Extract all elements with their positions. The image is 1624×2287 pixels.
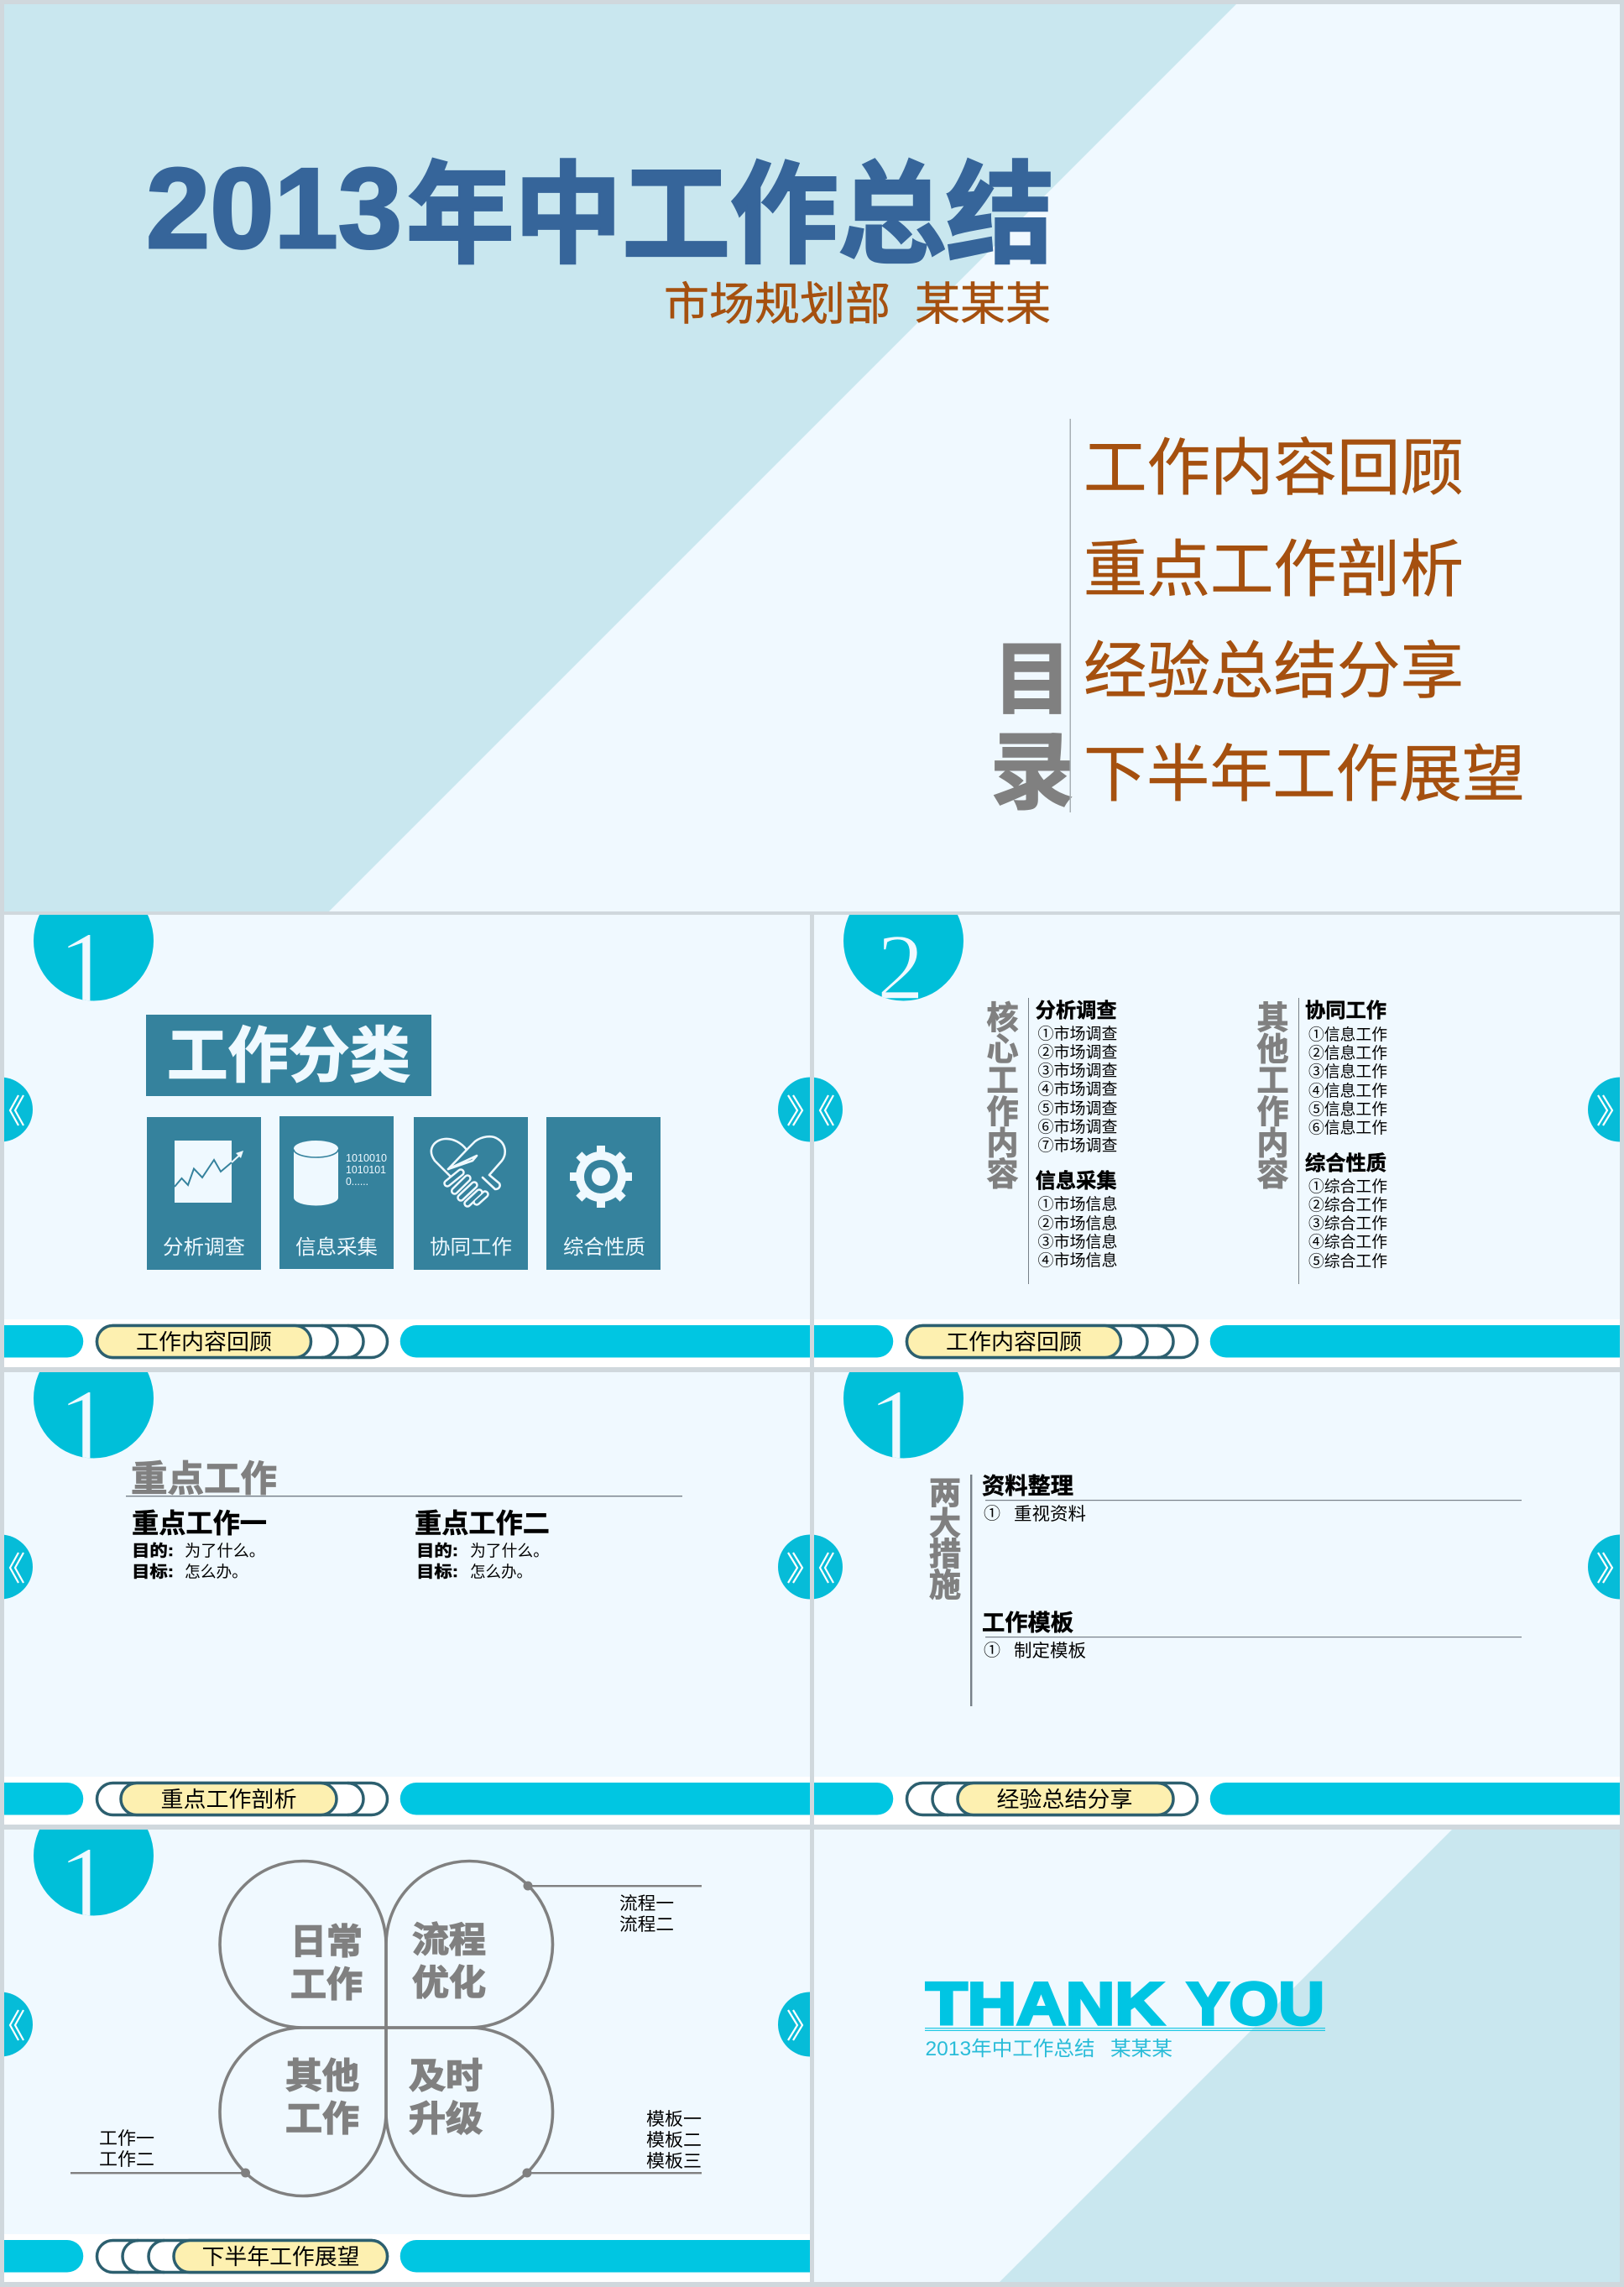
column heading: core work: 核心工作内容 <box>986 1001 1019 1193</box>
title: 2013 <box>146 144 402 272</box>
thank you heading <box>926 1971 1324 2038</box>
card: information: 1010101 <box>346 1163 386 1176</box>
list: analysis <box>1036 1000 1118 1155</box>
measure two: 制定模板 <box>1014 1642 1086 1661</box>
thank you heading: YOU <box>1187 1971 1324 2038</box>
clover labels: 其他 <box>285 2056 359 2096</box>
thank you subtitle: 某某某 <box>1110 2038 1172 2060</box>
contents list: 重点工作剖析 <box>1084 535 1464 604</box>
subtitle <box>664 279 1051 330</box>
title: 年中工作总结 <box>406 154 1054 277</box>
clover labels: 优化 <box>412 1963 486 2002</box>
contents list: 工作内容回顾 <box>1084 433 1464 503</box>
list: collaboration: ⑤信息工作 <box>1308 1100 1387 1119</box>
card: information: 0...... <box>346 1175 368 1188</box>
key work one: 为了什么。 <box>185 1542 265 1560</box>
callout: templates <box>522 2110 702 2177</box>
list: collaboration: 协同工作 <box>1305 1000 1386 1022</box>
list: analysis: ⑦市场调查 <box>1037 1136 1118 1155</box>
clover labels: 工作 <box>290 1965 363 2004</box>
card: general: 综合性质 <box>563 1236 645 1259</box>
slide: outlook: 下半年工作展望 <box>201 2244 359 2269</box>
slide: work content: 工作内容回顾 <box>946 1329 1082 1355</box>
slide: key work: 1 <box>58 1367 112 1486</box>
list: collaboration <box>1305 1000 1387 1137</box>
list: general: ③综合工作 <box>1308 1214 1387 1233</box>
progress pill <box>97 2241 388 2273</box>
key work one: 怎么办。 <box>185 1563 248 1581</box>
key work one <box>132 1508 267 1581</box>
key work two: 目的: <box>416 1542 458 1560</box>
key work two <box>415 1508 550 1581</box>
contents list <box>1084 433 1525 809</box>
thank you subtitle <box>925 2038 1172 2060</box>
heading: 工作分类 <box>146 1015 431 1096</box>
list: general: ④综合工作 <box>1308 1233 1387 1251</box>
callout: process: 流程二 <box>619 1915 674 1935</box>
list: general: ⑤综合工作 <box>1308 1252 1387 1271</box>
contents heading <box>990 635 1074 820</box>
card: information <box>279 1116 394 1269</box>
slide: outlook <box>4 1830 810 2282</box>
callout: templates: 模板三 <box>646 2152 702 2171</box>
slide: work content <box>814 915 1620 1367</box>
heading: 重点工作: 重点工作 <box>131 1459 277 1500</box>
list: information: ④市场信息 <box>1037 1251 1118 1270</box>
list: analysis: ②市场调查 <box>1037 1043 1118 1062</box>
subtitle: 某某某 <box>915 279 1051 330</box>
callout: work <box>70 2129 250 2177</box>
key work two: 怎么办。 <box>470 1563 532 1581</box>
measure one <box>982 1474 1522 1524</box>
list: analysis: ③市场调查 <box>1037 1062 1118 1080</box>
slide: outlook: 1 <box>58 1825 112 1944</box>
key work two: 为了什么。 <box>470 1542 549 1560</box>
list: general: ②综合工作 <box>1308 1196 1387 1214</box>
contents list: 经验总结分享 <box>1084 636 1464 706</box>
list: information: ②市场信息 <box>1037 1214 1118 1233</box>
slide: key work <box>4 1372 810 1825</box>
contents heading: 录 <box>990 726 1074 820</box>
callout: templates: 模板二 <box>646 2131 702 2150</box>
card: general <box>546 1117 661 1270</box>
contents heading: 目 <box>993 635 1072 723</box>
card: analysis <box>147 1117 261 1270</box>
progress pill <box>906 1783 1197 1814</box>
list: collaboration: ⑥信息工作 <box>1308 1119 1387 1137</box>
list: collaboration: ③信息工作 <box>1308 1063 1387 1081</box>
callout: work: 工作二 <box>99 2150 154 2170</box>
clover diagram <box>220 1861 553 2196</box>
slide: two measures: 经验总结分享 <box>997 1787 1133 1812</box>
measure one: 重视资料 <box>1014 1505 1086 1524</box>
key work one: 目标: <box>132 1563 174 1581</box>
title <box>146 144 1054 277</box>
clover labels: 日常 <box>290 1922 363 1961</box>
clover labels <box>285 1920 486 2138</box>
key work one: 目的: <box>132 1542 174 1560</box>
callout: process: 流程一 <box>619 1894 674 1914</box>
list: collaboration: ①信息工作 <box>1308 1026 1387 1044</box>
card: collaboration: 协同工作 <box>430 1236 512 1259</box>
card: analysis: 分析调查 <box>163 1236 245 1259</box>
thank you heading: THANK <box>926 1971 1164 2038</box>
list: general: 综合性质 <box>1305 1152 1386 1175</box>
measure one: ① <box>984 1504 1000 1523</box>
list: information: ③市场信息 <box>1037 1233 1118 1251</box>
list: analysis: ⑥市场调查 <box>1037 1118 1118 1136</box>
measure one: 资料整理 <box>982 1474 1073 1499</box>
list: information: 信息采集 <box>1036 1170 1117 1193</box>
list: collaboration: ②信息工作 <box>1308 1044 1387 1063</box>
column heading: other work: 其他工作内容 <box>1256 1001 1289 1193</box>
list: information: ①市场信息 <box>1037 1195 1118 1214</box>
measure two: 工作模板 <box>982 1611 1073 1636</box>
progress pill <box>906 1326 1197 1358</box>
list: general: ①综合工作 <box>1308 1177 1387 1196</box>
key work two: 重点工作二 <box>415 1508 550 1538</box>
list: information <box>1036 1170 1118 1270</box>
heading: 工作分类: 工作分类 <box>167 1023 410 1090</box>
card: collaboration <box>414 1117 528 1270</box>
slide: two measures <box>814 1372 1620 1825</box>
measure two <box>982 1611 1522 1661</box>
subtitle: 市场规划部 <box>664 279 890 330</box>
slide: key work: 重点工作剖析 <box>161 1787 297 1812</box>
clover labels: 流程 <box>412 1920 486 1960</box>
card: information: 信息采集 <box>295 1236 378 1259</box>
vertical heading: 两大措施: 两大措施 <box>929 1476 961 1604</box>
slide: work categories: 工作内容回顾 <box>136 1329 272 1355</box>
list: collaboration: ④信息工作 <box>1308 1082 1387 1100</box>
measure two: ① <box>984 1641 1000 1660</box>
slide: work categories <box>4 915 810 1367</box>
list: analysis: ④市场调查 <box>1037 1080 1118 1099</box>
slide: work categories: 1 <box>58 910 112 1029</box>
clover labels: 及时 <box>409 2056 483 2096</box>
slide: thank you <box>814 1830 1620 2282</box>
contents list: 下半年工作展望 <box>1084 739 1525 809</box>
clover labels: 升级 <box>409 2099 483 2138</box>
list: general <box>1305 1152 1387 1271</box>
slide: two measures: 1 <box>868 1367 922 1486</box>
key work one: 重点工作一 <box>132 1508 267 1538</box>
progress pill <box>97 1783 388 1814</box>
callout: work: 工作一 <box>99 2129 154 2149</box>
clover labels: 工作 <box>285 2099 359 2138</box>
thank you subtitle: 2013年中工作总结 <box>925 2038 1094 2060</box>
list: analysis: ①市场调查 <box>1037 1025 1118 1043</box>
card: information: 1010010 <box>346 1151 387 1164</box>
slide: work content: 2 <box>877 916 924 1020</box>
slide: title and contents <box>4 4 1620 911</box>
list: analysis: ⑤市场调查 <box>1037 1099 1118 1118</box>
callout: process <box>524 1882 702 1935</box>
callout: templates: 模板一 <box>646 2110 702 2129</box>
progress pill <box>97 1326 388 1358</box>
list: analysis: 分析调查 <box>1036 1000 1117 1022</box>
key work two: 目标: <box>416 1563 458 1581</box>
